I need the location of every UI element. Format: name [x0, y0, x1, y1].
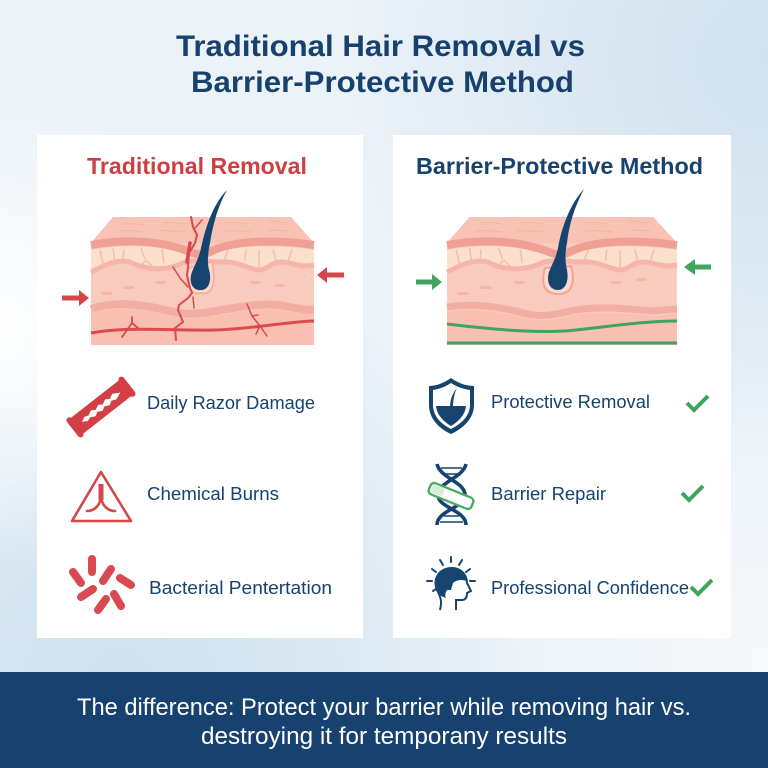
icon: razor blade	[65, 375, 137, 439]
label: bacterial pentertation: Bacterial Pentertation	[149, 578, 332, 598]
skin cross-section healthy	[447, 189, 677, 345]
panel heading: traditional removal: Traditional Removal	[87, 153, 307, 179]
title	[176, 30, 585, 99]
icon: check	[687, 396, 708, 410]
title: Barrier-Protective Method	[191, 66, 574, 99]
icon: head with radiating lines	[427, 557, 475, 610]
footer text: destroying it for temporany results	[201, 723, 567, 750]
panel: traditional removal	[37, 135, 363, 638]
skin cross-section with damage	[91, 190, 314, 345]
icon: check	[682, 486, 703, 500]
icon: DNA with bandage	[427, 464, 475, 525]
label: barrier repair: Barrier Repair	[491, 484, 606, 504]
icon: protective shield	[429, 378, 474, 434]
panel: barrier-protective method	[393, 135, 731, 638]
arrow: right pressure	[317, 267, 344, 283]
arrow: left support	[416, 274, 442, 290]
footer text	[77, 694, 691, 750]
label: chemical burns: Chemical Burns	[147, 484, 279, 504]
hair	[548, 189, 584, 290]
blood vessel	[91, 321, 314, 333]
label: professional confidence: Professional Confidence	[491, 578, 689, 598]
label: protective removal: Protective Removal	[491, 392, 650, 412]
title: Traditional Hair Removal vs	[176, 30, 585, 63]
footer text: The difference: Protect your barrier while removing hair vs.	[77, 694, 691, 721]
arrow: left pressure	[62, 290, 89, 306]
icon: bacteria	[73, 559, 131, 610]
label: daily razor damage: Daily Razor Damage	[147, 393, 315, 413]
follicle	[187, 262, 214, 293]
footer banner	[0, 672, 768, 768]
hair	[191, 190, 227, 290]
green protective lines	[447, 321, 677, 343]
icon: chemical warning triangle	[72, 472, 131, 521]
cracks	[122, 217, 267, 340]
panel heading: barrier-protective method: Barrier-Protective Method	[416, 153, 703, 179]
follicle	[543, 266, 573, 294]
arrow: right support	[684, 259, 711, 275]
icon: check	[691, 580, 712, 594]
